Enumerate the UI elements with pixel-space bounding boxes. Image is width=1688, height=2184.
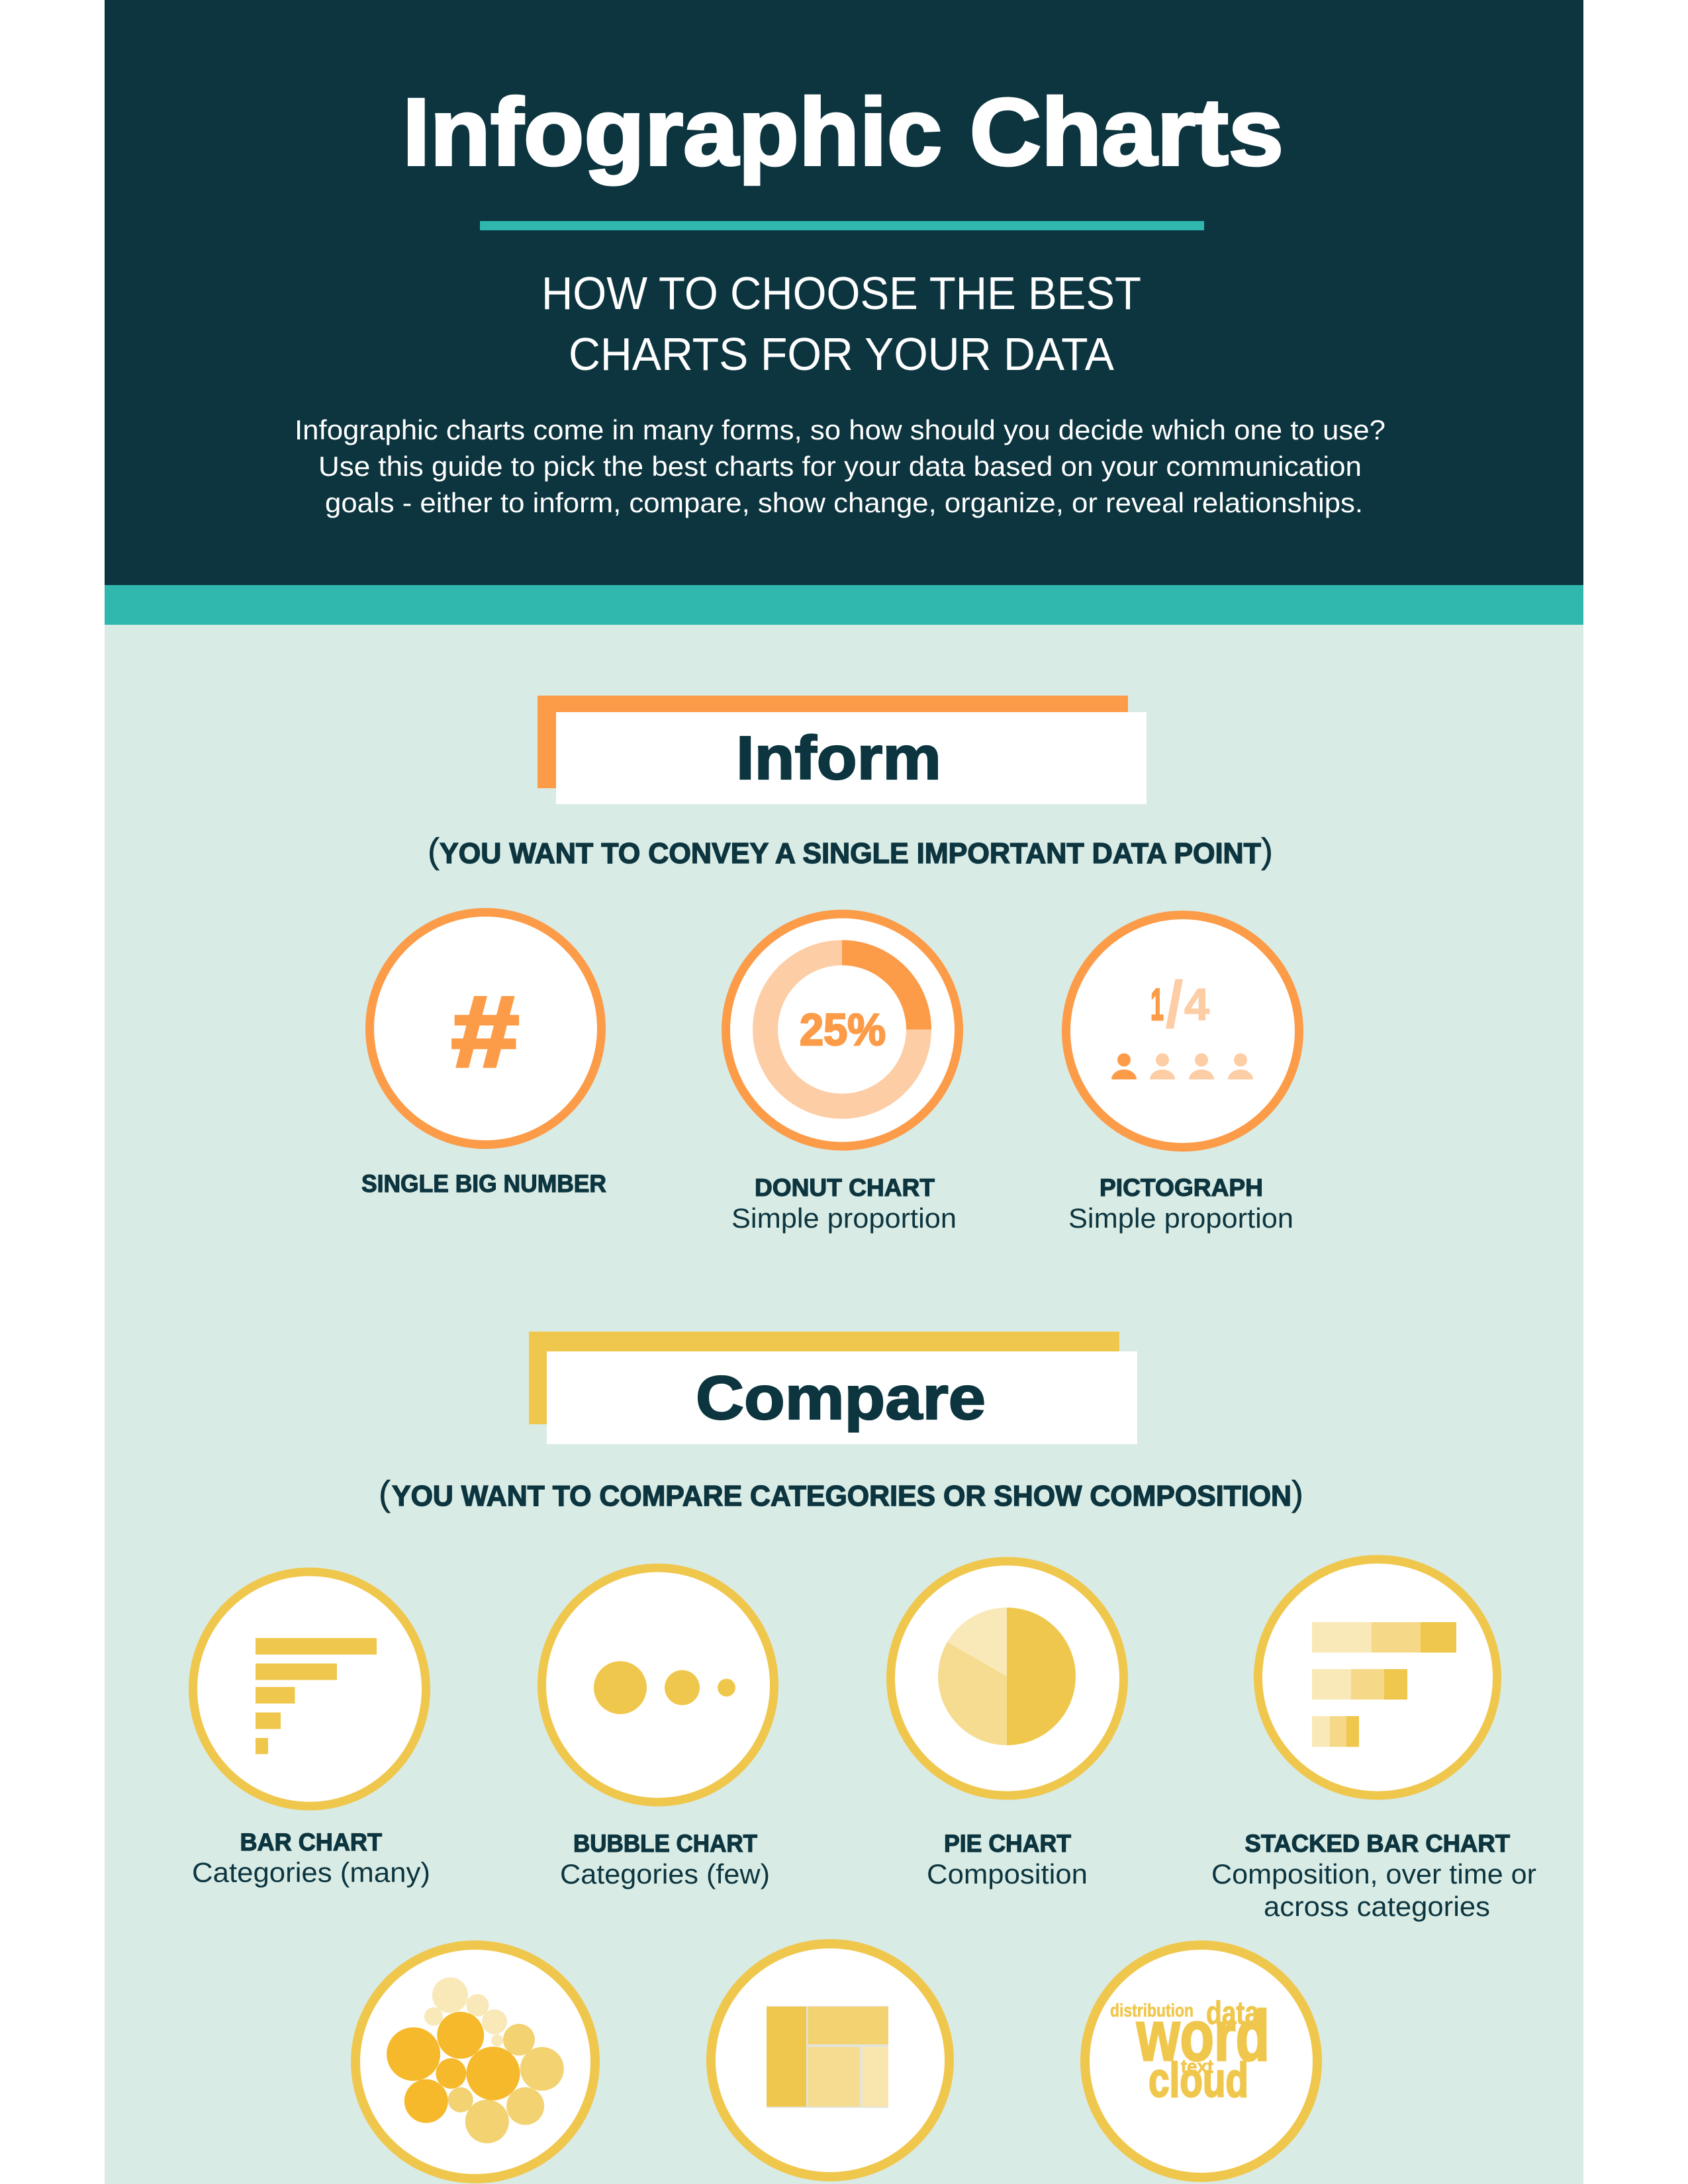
icon: single big number: # — [451, 976, 519, 1088]
icon: word cloud — [1085, 1945, 1317, 2177]
label: stacked bar chart: STACKED BAR CHART — [1244, 1830, 1510, 1857]
panel: compare — [192, 1332, 1536, 2179]
label: pie chart: PIE CHART — [944, 1830, 1071, 1857]
compare description: ) — [1291, 1474, 1303, 1514]
subtitle — [541, 267, 1141, 380]
intro paragraph: Use this guide to pick the best charts for your data based on your communication — [318, 451, 1362, 482]
inform description: ( — [428, 831, 440, 871]
icon: donut chart — [726, 914, 959, 1146]
title underline — [480, 221, 1204, 230]
panel: inform — [361, 696, 1299, 1234]
label: pie chart — [927, 1830, 1088, 1889]
subtitle: CHARTS FOR YOUR DATA — [569, 328, 1114, 380]
icon: bar chart — [193, 1572, 426, 1806]
label: bubble chart: BUBBLE CHART — [573, 1830, 757, 1857]
icon: word cloud: word — [1136, 1995, 1270, 2075]
icon: word cloud: data — [1206, 1995, 1260, 2031]
label: bubble chart: Categories (few) — [560, 1858, 770, 1889]
icon: treemap — [711, 1944, 949, 2177]
label: donut chart: DONUT CHART — [755, 1174, 935, 1201]
icon: word cloud: cloud — [1149, 2054, 1248, 2107]
icon: pictograph: / — [1165, 968, 1184, 1042]
icon: word cloud: text — [1181, 2056, 1213, 2077]
label: stacked bar chart: across categories — [1264, 1891, 1490, 1922]
inform description: YOU WANT TO CONVEY A SINGLE IMPORTANT DATA POINT — [440, 837, 1261, 870]
label: pictograph — [1068, 1174, 1293, 1234]
heading: inform — [538, 696, 1147, 804]
label: donut chart — [731, 1174, 957, 1234]
compare description: ( — [379, 1474, 391, 1514]
icon: single big number — [369, 912, 601, 1145]
heading: compare — [529, 1332, 1137, 1444]
inform description: ) — [1261, 831, 1273, 871]
label: bubble chart — [560, 1830, 770, 1889]
icon: donut chart: 25% — [800, 1005, 886, 1055]
icon: stacked bar chart — [1258, 1559, 1497, 1796]
compare description: YOU WANT TO COMPARE CATEGORIES OR SHOW COMPOSITION — [392, 1480, 1291, 1512]
intro paragraph — [295, 414, 1385, 518]
label: donut chart: Simple proportion — [731, 1203, 957, 1234]
icon: pictograph — [1066, 915, 1299, 1148]
label: bar chart — [192, 1829, 430, 1888]
heading: inform: Inform — [736, 723, 941, 792]
label: single big number: SINGLE BIG NUMBER — [361, 1170, 606, 1197]
label: pictograph: PICTOGRAPH — [1100, 1174, 1263, 1201]
header panel — [105, 0, 1583, 625]
label: stacked bar chart — [1211, 1830, 1536, 1922]
intro paragraph: goals - either to inform, compare, show change, organize, or reveal relationships. — [325, 487, 1363, 518]
icon: bubble chart — [541, 1568, 774, 1802]
title: Infographic Charts — [402, 79, 1284, 185]
subtitle: HOW TO CHOOSE THE BEST — [541, 267, 1141, 319]
heading: compare: Compare — [696, 1363, 986, 1432]
icon: packed bubbles — [355, 1945, 595, 2179]
label: bar chart: BAR CHART — [240, 1829, 382, 1856]
label: bar chart: Categories (many) — [192, 1857, 430, 1888]
label: stacked bar chart: Composition, over time or — [1211, 1858, 1536, 1889]
icon: pie chart — [891, 1561, 1124, 1796]
icon: word cloud: distribution — [1110, 2000, 1194, 2021]
teal band — [105, 585, 1583, 625]
intro paragraph: Infographic charts come in many forms, so how should you decide which one to use? — [295, 414, 1385, 445]
page background panel — [105, 625, 1583, 2184]
label: pie chart: Composition — [927, 1858, 1088, 1889]
icon: pictograph: 1 — [1150, 979, 1164, 1030]
label: pictograph: Simple proportion — [1068, 1203, 1293, 1234]
icon: pictograph: 4 — [1184, 979, 1209, 1030]
